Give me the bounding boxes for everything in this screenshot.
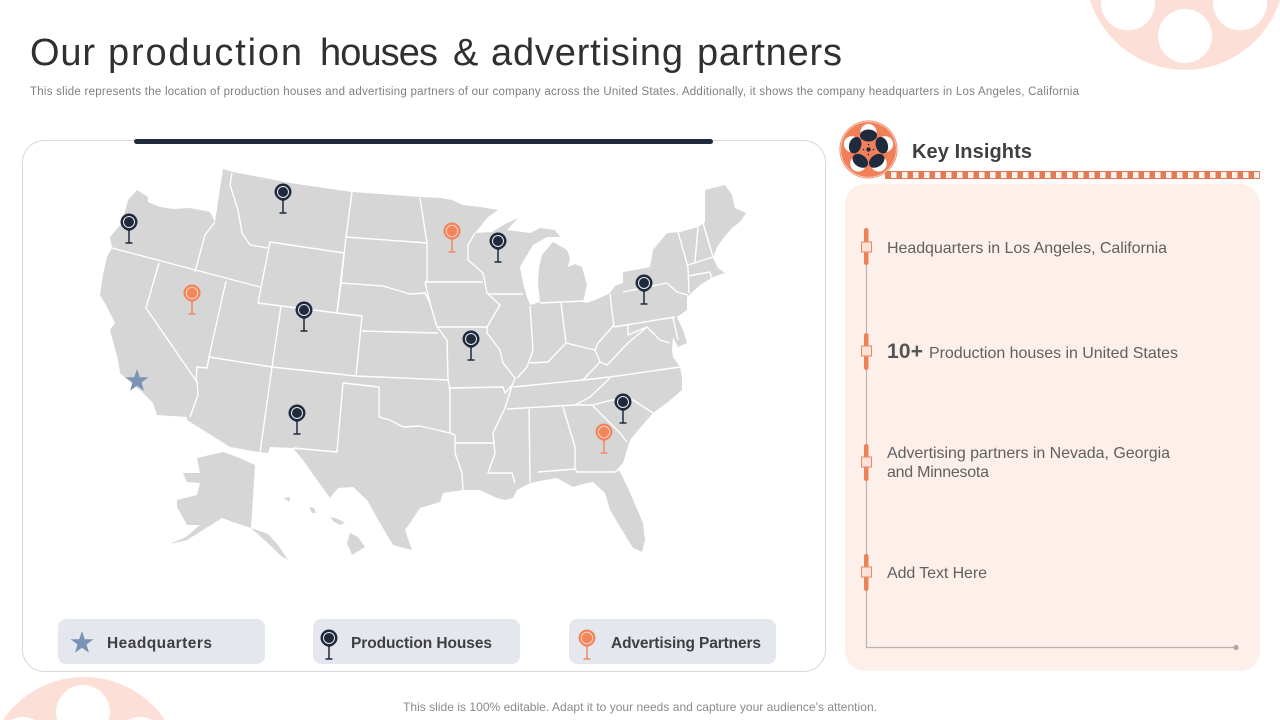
panel: map [22, 139, 826, 672]
legend label: Advertising Partners [611, 635, 761, 652]
title: houses [320, 32, 438, 74]
insight 3 [862, 444, 1170, 481]
pin: production house, Missouri [462, 330, 480, 360]
insight text: Add Text Here [887, 565, 987, 582]
icon: legend dark pin [320, 630, 338, 659]
insight text: and Minnesota [887, 464, 989, 481]
insight number: 10+ [887, 340, 923, 363]
insight text: Production houses in United States [929, 345, 1178, 362]
pin: production house, Wisconsin [490, 232, 506, 262]
insight text: Headquarters in Los Angeles, California [887, 240, 1167, 257]
legend: advertising partners [569, 619, 776, 664]
decorative film reel: top right [1090, 0, 1280, 70]
pin: advertising partner, Minnesota [444, 222, 460, 252]
pin: advertising partner, Georgia [596, 424, 612, 453]
pin: production house, Colorado [296, 302, 312, 331]
title: advertising [491, 32, 683, 74]
panel: key insights [845, 184, 1260, 671]
legend: headquarters [58, 619, 265, 664]
subtitle text: This slide represents the location of production houses and advertising partners of our company across the United States. Additionally, it shows the company headquarters in Los Angeles, California [30, 86, 1080, 98]
icon: film reel [840, 120, 898, 178]
map: Alaska [170, 452, 255, 544]
pin: advertising partner, Nevada [184, 284, 200, 314]
pin: production house, Oregon [120, 214, 138, 243]
insight 4 [862, 554, 987, 591]
heading: key insights: Key Insights [912, 141, 1032, 163]
marker [862, 228, 872, 265]
legend: production houses [313, 619, 520, 664]
film strip divider [885, 171, 1260, 179]
footer note: This slide is 100% editable. Adapt it to your needs and capture your audience's attention. [403, 700, 877, 714]
icon: legend star [71, 631, 93, 653]
panel top bar [134, 139, 713, 144]
map: Alaska panhandle [251, 528, 288, 560]
pin: production house, Pennsylvania [636, 274, 652, 304]
title: Our [30, 32, 95, 74]
icon: headquarters star, Los Angeles [126, 369, 148, 391]
pin: production house, South Carolina [614, 394, 632, 423]
map: United States [100, 169, 746, 560]
pin: production house, New Mexico [288, 404, 306, 434]
map: contiguous states landmass [100, 169, 746, 552]
marker [862, 554, 872, 591]
icon: legend orange pin [578, 630, 596, 659]
insight text: Advertising partners in Nevada, Georgia [887, 445, 1170, 462]
insight 2 [862, 333, 1178, 370]
title: production [108, 32, 302, 74]
title: partners [697, 32, 842, 74]
legend label: Headquarters [107, 635, 212, 652]
map: state borders [112, 173, 713, 490]
insight text [887, 445, 1170, 481]
map: Hawaii [284, 497, 365, 555]
title: & [453, 32, 478, 74]
insight 1 [862, 228, 1167, 265]
decorative film reel: bottom left [3, 677, 165, 720]
marker [862, 444, 872, 481]
timeline axis [866, 230, 1239, 650]
pin: production house, Montana [274, 184, 292, 213]
legend label: Production Houses [351, 635, 492, 652]
marker [862, 333, 872, 370]
